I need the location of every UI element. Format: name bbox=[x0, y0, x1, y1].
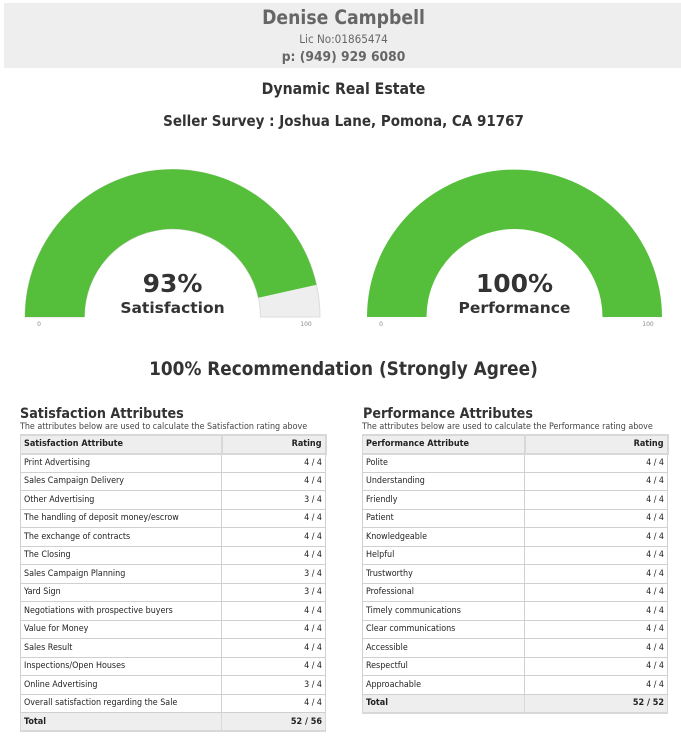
table: performance attributes: Friendly bbox=[366, 495, 397, 505]
table: performance attributes: 4 / 4 bbox=[646, 643, 664, 653]
table: satisfaction attributes: Yard Sign bbox=[24, 587, 61, 597]
table: performance attributes bbox=[362, 434, 669, 714]
table: satisfaction attributes: Negotiations with prospective buyers bbox=[24, 606, 173, 616]
table: satisfaction attributes: Sales Campaign Delivery bbox=[24, 476, 124, 486]
table: satisfaction attributes: Overall satisfaction regarding the Sale bbox=[24, 698, 177, 708]
table: satisfaction attributes: Other Advertising bbox=[24, 495, 94, 505]
satisfaction attributes heading: Satisfaction Attributes bbox=[20, 406, 184, 422]
table: satisfaction attributes bbox=[20, 434, 327, 732]
company name: Dynamic Real Estate bbox=[262, 79, 425, 98]
gauge: performance: Performance bbox=[459, 299, 570, 317]
table: performance attributes: Helpful bbox=[366, 550, 394, 560]
table: performance attributes: 4 / 4 bbox=[646, 587, 664, 597]
table: satisfaction attributes: 4 / 4 bbox=[304, 532, 322, 542]
table: performance attributes: Timely communications bbox=[366, 606, 461, 616]
table: performance attributes: 4 / 4 bbox=[646, 476, 664, 486]
performance attributes note: The attributes below are used to calculate the Performance rating above bbox=[362, 422, 653, 432]
table: performance attributes: 4 / 4 bbox=[646, 606, 664, 616]
table: performance attributes: 4 / 4 bbox=[646, 569, 664, 579]
table: performance attributes: 4 / 4 bbox=[646, 513, 664, 523]
gauge: satisfaction: Satisfaction bbox=[120, 299, 225, 317]
table: performance attributes: Respectful bbox=[366, 661, 408, 671]
gauge: performance: 0 bbox=[379, 321, 383, 328]
table: performance attributes: Rating bbox=[634, 439, 664, 449]
table: performance attributes: Knowledgeable bbox=[366, 532, 427, 542]
phone: p: (949) 929 6080 bbox=[282, 49, 405, 65]
table: satisfaction attributes: Print Advertising bbox=[24, 458, 90, 468]
table: performance attributes: 4 / 4 bbox=[646, 680, 664, 690]
table: satisfaction attributes: Satisfaction Attribute bbox=[24, 439, 123, 449]
table: satisfaction attributes: 4 / 4 bbox=[304, 624, 322, 634]
table: satisfaction attributes: Online Advertising bbox=[24, 680, 97, 690]
table: performance attributes: 4 / 4 bbox=[646, 532, 664, 542]
table: satisfaction attributes: 4 / 4 bbox=[304, 458, 322, 468]
table: satisfaction attributes: 4 / 4 bbox=[304, 476, 322, 486]
header banner bbox=[4, 3, 681, 68]
gauge: performance: 100 bbox=[642, 321, 654, 328]
table: satisfaction attributes: 3 / 4 bbox=[304, 587, 322, 597]
survey title: Seller Survey : Joshua Lane, Pomona, CA 91767 bbox=[163, 112, 524, 130]
satisfaction attributes note: The attributes below are used to calculate the Satisfaction rating above bbox=[20, 422, 307, 432]
table: performance attributes: 4 / 4 bbox=[646, 495, 664, 505]
table: satisfaction attributes: Sales Campaign Planning bbox=[24, 569, 125, 579]
table: satisfaction attributes: 3 / 4 bbox=[304, 680, 322, 690]
table: performance attributes: 4 / 4 bbox=[646, 550, 664, 560]
agent name: Denise Campbell bbox=[262, 6, 425, 29]
table: performance attributes: 52 / 52 bbox=[633, 698, 664, 708]
table: performance attributes: Approachable bbox=[366, 680, 421, 690]
table: performance attributes: Patient bbox=[366, 513, 394, 523]
table: satisfaction attributes: Rating bbox=[292, 439, 322, 449]
table: performance attributes: Professional bbox=[366, 587, 414, 597]
table: performance attributes: Total bbox=[366, 698, 388, 708]
table: satisfaction attributes: The Closing bbox=[24, 550, 71, 560]
gauge: performance: 100% bbox=[476, 269, 553, 298]
table: satisfaction attributes: The exchange of contracts bbox=[24, 532, 130, 542]
table: satisfaction attributes: 3 / 4 bbox=[304, 495, 322, 505]
performance attributes heading: Performance Attributes bbox=[363, 406, 533, 422]
gauge: performance bbox=[367, 170, 662, 328]
table: performance attributes: Performance Attribute bbox=[366, 439, 469, 449]
table: satisfaction attributes: 4 / 4 bbox=[304, 606, 322, 616]
table: satisfaction attributes: 4 / 4 bbox=[304, 550, 322, 560]
table: satisfaction attributes: Total bbox=[24, 716, 46, 726]
table: satisfaction attributes: 3 / 4 bbox=[304, 569, 322, 579]
table: satisfaction attributes: The handling of deposit money/escrow bbox=[24, 513, 179, 523]
table: satisfaction attributes: 4 / 4 bbox=[304, 513, 322, 523]
table: performance attributes: 4 / 4 bbox=[646, 624, 664, 634]
table: performance attributes: Polite bbox=[366, 458, 388, 468]
table: performance attributes: 4 / 4 bbox=[646, 458, 664, 468]
table: performance attributes: 4 / 4 bbox=[646, 661, 664, 671]
table: satisfaction attributes: Value for Money bbox=[24, 624, 88, 634]
table: satisfaction attributes: 4 / 4 bbox=[304, 661, 322, 671]
table: satisfaction attributes: 4 / 4 bbox=[304, 643, 322, 653]
recommendation headline: 100% Recommendation (Strongly Agree) bbox=[149, 359, 538, 380]
table: satisfaction attributes: Sales Result bbox=[24, 643, 72, 653]
table: performance attributes: Accessible bbox=[366, 643, 408, 653]
gauge: satisfaction: 93% bbox=[143, 269, 202, 298]
gauge: satisfaction: 0 bbox=[37, 321, 41, 328]
table: performance attributes: Trustworthy bbox=[366, 569, 413, 579]
table: satisfaction attributes: 52 / 56 bbox=[291, 716, 322, 726]
table: satisfaction attributes: 4 / 4 bbox=[304, 698, 322, 708]
gauge: satisfaction bbox=[24, 169, 320, 328]
license number: Lic No:01865474 bbox=[299, 32, 388, 46]
gauge: satisfaction: 100 bbox=[300, 321, 312, 328]
table: performance attributes: Understanding bbox=[366, 476, 425, 486]
table: satisfaction attributes: Inspections/Open Houses bbox=[24, 661, 125, 671]
table: performance attributes: Clear communications bbox=[366, 624, 455, 634]
